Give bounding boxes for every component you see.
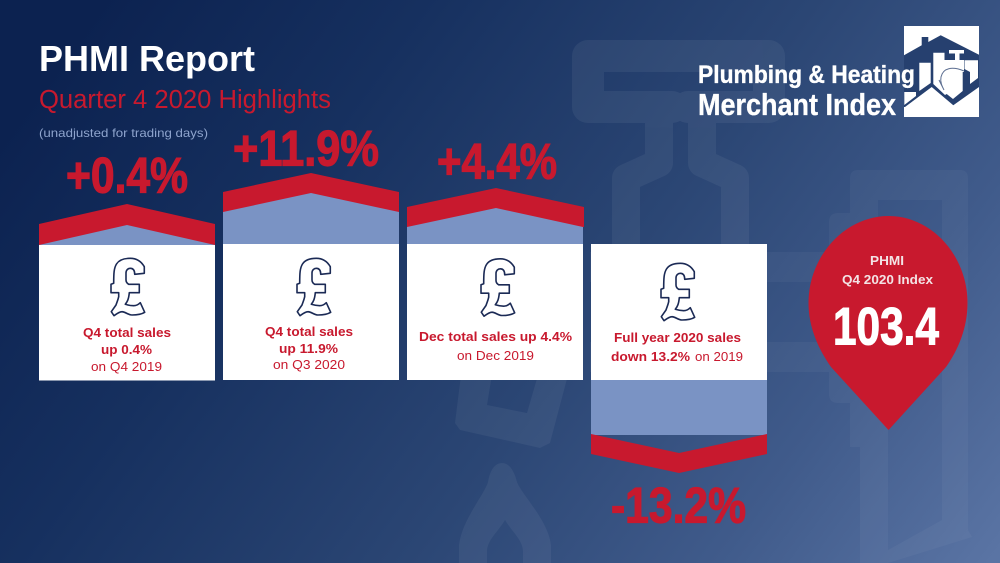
label: Q4 total sales — [83, 325, 171, 340]
background icon: tap — [588, 56, 769, 250]
label: Q4 total sales — [265, 324, 353, 339]
title: PHMI Report — [39, 38, 255, 79]
pin: PHMI index: 103.4 — [833, 298, 939, 356]
logo text — [698, 61, 915, 122]
label: on Q4 2019 — [91, 359, 162, 374]
pin: PHMI index: PHMI — [870, 253, 904, 268]
icon: pound — [481, 259, 515, 316]
label — [265, 324, 353, 372]
label: down 13.2% — [611, 349, 690, 364]
label: Full year 2020 sales — [614, 330, 741, 345]
label: on Q3 2020 — [273, 357, 345, 372]
figure: +0.4%: +0.4% — [66, 148, 188, 204]
pin: PHMI index: Q4 2020 Index — [842, 272, 934, 287]
logo mark: house and tap — [904, 26, 979, 117]
background icon: valve body — [455, 375, 568, 448]
icon: pound — [297, 258, 331, 316]
figure: +11.9%: +11.9% — [233, 120, 379, 176]
background icon: flame — [459, 463, 551, 563]
note: (unadjusted for trading days) — [39, 126, 208, 140]
background icon: radiator — [590, 170, 972, 563]
logo — [698, 26, 979, 122]
figure: -13.2%: -13.2% — [611, 478, 746, 534]
logo text: Merchant Index — [698, 87, 897, 122]
icon: pound — [661, 263, 695, 321]
pin: PHMI index — [808, 216, 968, 430]
label: up 11.9% — [279, 341, 338, 356]
label — [419, 329, 572, 363]
label: Dec total sales up 4.4% — [419, 329, 572, 344]
label: on 2019 — [695, 349, 743, 364]
label — [611, 330, 743, 364]
logo text: Plumbing & Heating — [698, 61, 915, 89]
label — [83, 325, 171, 374]
figure: +4.4%: +4.4% — [437, 134, 557, 190]
panel: Q4 on Q4 — [39, 148, 215, 380]
panel: full year — [591, 244, 767, 534]
label: up 0.4% — [101, 342, 152, 357]
panel: December — [407, 134, 584, 380]
panel: Q4 on Q3 — [223, 120, 399, 380]
label: on Dec 2019 — [457, 348, 534, 363]
icon: pound — [111, 258, 145, 316]
subtitle: Quarter 4 2020 Highlights — [39, 86, 331, 114]
